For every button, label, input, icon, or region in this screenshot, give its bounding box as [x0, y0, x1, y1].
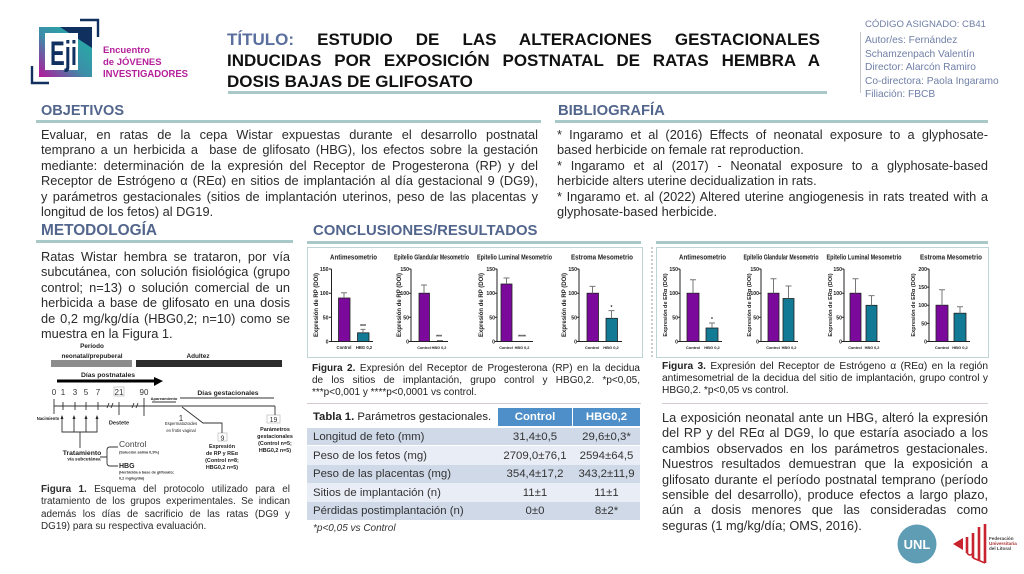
caption: figura 1: DG19) para su respectiva evaluación. — [41, 521, 206, 532]
panel: figure 2 charts — [307, 247, 643, 358]
figure 1: experimental protocol: 3 — [73, 388, 78, 397]
chart: epitelio glandular RP: 50 — [403, 316, 409, 322]
text: bibliografía: glyphosate-based herbicide. — [557, 204, 717, 219]
figure 1: experimental protocol: Apareamiento — [151, 396, 178, 401]
text: bibliografía: * Ingaramo et al (2017) - Neonatal exposure to a glyphosate-based — [557, 158, 988, 173]
title: DOSIS BAJAS DE GLIFOSATO — [227, 72, 473, 91]
figure 1: experimental protocol: 1 — [179, 414, 184, 423]
chart: estroma ER: 50 — [921, 322, 927, 328]
table: parámetros gestacionales: Control — [515, 411, 555, 423]
caption: figura 1: además los días de sacrificio de las ratas (DG9 y — [41, 509, 290, 520]
chart: epitelio glandular RP: *** — [436, 334, 442, 340]
chart: antimesometrio ER: Antimesometrio — [679, 252, 726, 262]
figure 1: experimental protocol: 5 — [84, 388, 89, 397]
chart: epitelio luminal ER: 150 — [833, 267, 842, 273]
figure 1: experimental protocol: 19 — [270, 417, 277, 424]
caption: figura 2: Figura 2. Expresión del Receptor de Progesterona (RP) en la decidua — [312, 363, 640, 374]
chart: antimesometrio RP: 50 — [323, 316, 329, 322]
figure 1: experimental protocol: 0,2 mg/kg/día) — [119, 476, 145, 480]
caption: figura 3: Figura 3. Expresión del Receptor de Estrógeno α (REα) en la región — [662, 361, 988, 372]
chart: estroma RP: 150 — [568, 267, 577, 273]
chart: epitelio luminal RP: 150 — [486, 267, 495, 273]
text: conclusiones: seguras (1 mg/kg/día; OMS, 2016). — [662, 518, 862, 533]
logo: Federación Universitaria del Litoral — [953, 524, 1017, 564]
chart: antimesometrio ER — [663, 252, 726, 350]
chart: epitelio glandular ER: Control — [766, 346, 780, 350]
chart: epitelio luminal ER: 50 — [836, 316, 842, 322]
chart: epitelio luminal ER — [826, 252, 902, 350]
chart: antimesometrio RP: *** — [360, 324, 366, 330]
text: objetivos: mediante: determinación de la expresión del Receptor de Progesterona (RP) y del — [41, 158, 538, 173]
figure 1: experimental protocol: Tratamiento — [63, 450, 101, 457]
table: parámetros gestacionales: Pérdidas postimplantación (n) — [313, 505, 464, 517]
figure 1: experimental protocol: HBG0,2 n=5) — [206, 465, 238, 471]
text: conclusiones: glifosato durante el período postnatal temprano (período — [662, 472, 988, 487]
caption: figura 1: Figura 1. Esquema del protocolo utilizado para el — [41, 484, 290, 495]
table: parámetros gestacionales: Sitios de implantación (n) — [313, 487, 441, 499]
caption: figura 3: HBG0,2. *p<0,05 vs control. — [662, 385, 789, 396]
text: metodología: herbicida a base de glifosato en una dosis — [41, 295, 290, 310]
table: parámetros gestacionales: 31,4±0,5 — [513, 431, 557, 443]
text: objetivos: longitud de los fetos) al DG19. — [41, 204, 213, 219]
chart: estroma RP: 50 — [571, 316, 577, 322]
text: conclusiones: del RP y del REα al DG9, lo que estaría asociado a los — [662, 425, 988, 440]
table: parámetros gestacionales: 29,6±0,3* — [582, 431, 631, 443]
table: parámetros gestacionales: 8±2* — [595, 505, 618, 517]
caption: figura 1: tratamiento de los grupos experimentales. Se indican — [41, 496, 290, 507]
chart: estroma RP: Expresión de RP (DOI) — [562, 273, 568, 337]
text: objetivos: temprano a un herbicida a base de glifosato (HBG), los efectos sobre la gestación — [41, 142, 538, 157]
logo: Federación Universitaria del Litoral: Universitaria — [989, 541, 1017, 546]
chart: epitelio glandular RP — [394, 252, 469, 350]
figure 1: experimental protocol: en frotis vaginal — [166, 428, 196, 433]
chart: epitelio glandular RP: 100 — [400, 291, 409, 297]
table: parámetros gestacionales — [307, 408, 640, 534]
chart: estroma ER: Expresión de ERα (DOI) — [911, 273, 917, 337]
table: parámetros gestacionales: Tabla 1. Parámetros gestacionales. — [313, 411, 491, 423]
chart: antimesometrio ER: * — [711, 317, 713, 323]
chart: estroma RP: HBG 0,2 — [603, 345, 620, 350]
heading: objetivos: OBJETIVOS — [41, 103, 124, 119]
figure 1: experimental protocol: Control — [119, 439, 147, 449]
chart: epitelio luminal ER: 0 — [839, 340, 842, 346]
table: parámetros gestacionales: 0±0 — [526, 505, 544, 517]
text: conclusiones: Nuestros resultados demuestran que la exposición a — [662, 456, 988, 471]
divider lines — [307, 403, 641, 404]
text: metodología: subcutánea, con solución fisiológica (grupo — [41, 264, 290, 279]
chart: epitelio glandular ER — [744, 252, 819, 350]
figure 1: experimental protocol: HBG — [119, 463, 135, 470]
table: parámetros gestacionales: 11±1 — [523, 487, 547, 499]
logo: Encuentro de Jóvenes Investigadores: Encuentro — [103, 45, 150, 56]
figure 1: experimental protocol: 0 — [52, 388, 57, 397]
chart: antimesometrio ER: 150 — [669, 267, 678, 273]
title: INDUCIDAS POR EXPOSICIÓN POSTNATAL DE RATAS HEMBRA A — [227, 51, 820, 70]
text: bibliografía: * Ingaramo et. al (2022) Altered uterine angiogenesis in rats treated with a — [557, 189, 988, 204]
chart: epitelio luminal ER: Control — [848, 346, 862, 350]
figure 1: experimental protocol: 7 — [96, 388, 101, 397]
figure 1: experimental protocol: de RP y REα — [206, 451, 239, 457]
table: parámetros gestacionales: *p<0,05 vs Control — [313, 523, 396, 534]
chart: antimesometrio RP — [314, 252, 377, 350]
table: parámetros gestacionales: 2709,0±76,1 — [503, 450, 567, 462]
text: conclusiones: aún a dosis menores que las consideradas como — [662, 502, 988, 517]
text: bibliografía — [557, 127, 988, 219]
text: bibliografía: herbicide alters uterine decidualization in rats. — [557, 173, 817, 188]
chart: epitelio glandular RP: HBG 0,2 — [432, 346, 446, 350]
chart: estroma ER: HBG 0,2 — [952, 345, 969, 350]
chart: epitelio glandular RP: 0 — [406, 340, 409, 346]
figure 1: experimental protocol: (Herbicida a base de glifosato; — [119, 470, 174, 474]
chart: estroma ER: 150 — [918, 285, 927, 291]
chart: epitelio luminal RP: Expresión de RP (DOI) — [479, 273, 485, 337]
chart: estroma RP: 0 — [574, 340, 577, 346]
table: parámetros gestacionales: Peso de los fetos (mg) — [313, 450, 427, 462]
figure 1: experimental protocol: (Solución salina 0,9%) — [119, 450, 160, 454]
chart: epitelio luminal RP: HBG 0,2 — [515, 346, 529, 350]
chart: antimesometrio RP: 100 — [320, 291, 329, 297]
text: conclusiones — [662, 410, 988, 533]
table: parámetros gestacionales: Peso de las placentas (mg) — [313, 468, 451, 480]
chart: epitelio glandular ER: HBG 0,2 — [782, 346, 796, 350]
figure 1: experimental protocol: vía subcutánea — [67, 456, 101, 462]
chart: epitelio luminal ER: 100 — [833, 291, 842, 297]
chart: estroma ER: Control — [935, 345, 949, 350]
table: parámetros gestacionales: Longitud de feto (mm) — [313, 431, 424, 443]
chart: estroma ER: 100 — [918, 303, 927, 309]
table: parámetros gestacionales: 2594±64,5 — [580, 450, 633, 462]
text: bibliografía: * Ingaramo et al (2016) Effects of neonatal exposure to a glyphosate- — [557, 127, 988, 142]
caption: figura 2: ***p<0,001 y ****p<0,0001 vs control. — [312, 387, 477, 398]
chart: antimesometrio ER: Control — [686, 345, 700, 350]
figure 1: experimental protocol: 9 — [221, 436, 225, 442]
chart: estroma RP: Estroma Mesometrio — [571, 252, 633, 262]
logo: Encuentro de Jóvenes Investigadores: Eji — [50, 35, 77, 73]
chart: estroma RP: * — [611, 305, 613, 311]
panel: figure 3 charts — [652, 247, 989, 358]
chart: epitelio luminal RP: Control — [499, 346, 513, 350]
table: parámetros gestacionales: HBG0,2 — [586, 411, 627, 423]
figure 1: experimental protocol: (Control n=8; — [205, 458, 239, 464]
text: metodología: control; n=13) o solución comercial de un — [41, 280, 290, 295]
chart: epitelio luminal ER: Epitelio Luminal Mesometrio — [826, 252, 902, 262]
text: objetivos — [41, 127, 538, 219]
chart: estroma RP: Control — [585, 345, 599, 350]
chart: antimesometrio RP: HBG 0,2 — [356, 345, 373, 350]
chart: estroma ER: 200 — [918, 267, 927, 273]
figure 1: experimental protocol: Nacimiento — [37, 416, 60, 421]
chart: epitelio luminal RP: 100 — [486, 291, 495, 297]
text: objetivos: y parámetros gestacionales (sitios de implantación uterinos, peso de las placentas y — [41, 189, 538, 204]
author information — [860, 18, 999, 100]
caption: figura 2: de los sitios de implantación, grupo control y HBG0,2. *p<0,05, — [312, 375, 640, 386]
chart: epitelio luminal RP — [477, 252, 552, 350]
text: conclusiones: La exposición neonatal ante un HBG, alteró la expresión — [662, 410, 988, 425]
chart: antimesometrio RP: Expresión de RP (DOI) — [314, 273, 320, 337]
chart: epitelio glandular RP: 150 — [400, 267, 409, 273]
figure 1: experimental protocol: 90 — [140, 388, 149, 397]
chart: epitelio glandular RP: Epitelio Glandular Mesometrio — [394, 252, 469, 262]
figure 1: experimental protocol: (Control n=5; — [258, 441, 292, 447]
figure 1: experimental protocol — [37, 343, 293, 480]
chart: epitelio luminal RP: 0 — [492, 340, 495, 346]
chart: epitelio luminal RP: Epitelio Luminal Mesometrio — [477, 252, 552, 262]
chart: estroma RP: 100 — [568, 291, 577, 297]
figure 1: experimental protocol: Adultez — [186, 353, 210, 360]
chart: antimesometrio RP: 0 — [326, 340, 329, 346]
table: parámetros gestacionales: 354,4±17,2 — [507, 468, 563, 480]
text: metodología: Ratas Wistar hembra se trataron, por vía — [41, 249, 290, 264]
heading: metodología: METODOLOGÍA — [41, 222, 157, 239]
chart: antimesometrio ER: Expresión de ERα (DOI) — [663, 273, 669, 337]
chart: antimesometrio ER: 50 — [672, 316, 678, 322]
figure 1: experimental protocol: 21 — [115, 388, 124, 397]
text: conclusiones: cambios observados en los parámetros gestacionales. — [662, 441, 988, 456]
author information: CÓDIGO ASIGNADO: CB41 — [865, 19, 986, 30]
figure 1: experimental protocol: Destete — [109, 420, 129, 426]
logo: Encuentro de Jóvenes Investigadores: INVESTIGADORES — [103, 69, 188, 80]
chart: epitelio glandular ER: 50 — [753, 316, 759, 322]
figure 1: experimental protocol: Parámetros — [260, 427, 290, 433]
caption: figura 1 — [41, 484, 290, 532]
text: metodología: de 0,2 mg/kg/día (HBG0,2; n=10) como se — [41, 311, 290, 326]
chart: epitelio glandular ER: 150 — [750, 267, 759, 273]
chart: estroma ER: Estroma Mesometrio — [920, 252, 982, 262]
figure 1: experimental protocol: Período — [80, 343, 104, 350]
logo: Federación Universitaria del Litoral: del Litoral — [989, 546, 1011, 551]
chart: epitelio luminal RP: 50 — [489, 316, 495, 322]
text: bibliografía: based herbicide on female rat reproduction. — [557, 142, 804, 157]
caption: figura 2 — [312, 363, 640, 398]
chart: antimesometrio ER: 0 — [675, 340, 678, 346]
text: metodología: muestra en la Figura 1. — [41, 326, 173, 341]
figure 1: experimental protocol: Espermatozoides — [165, 421, 197, 426]
chart: antimesometrio RP: Control — [337, 345, 351, 350]
table: parámetros gestacionales: 11±1 — [594, 487, 619, 499]
chart: antimesometrio RP: Antimesometrio — [330, 252, 377, 262]
chart: antimesometrio ER: HBG 0,2 — [704, 345, 721, 350]
chart: epitelio luminal ER: HBG 0,2 — [865, 346, 879, 350]
author information: Director: Alarcón Ramiro — [865, 62, 976, 73]
figure 1: experimental protocol: neonatal/prepuberal — [61, 353, 123, 360]
chart: estroma ER — [911, 252, 982, 350]
heading: bibliografía: BIBLIOGRAFÍA — [558, 103, 665, 119]
chart: epitelio glandular RP: Expresión de RP (DOI) — [397, 273, 403, 337]
author information: Autor/es: Fernández — [865, 35, 957, 46]
figure 1: experimental protocol: Días gestacionales — [197, 390, 259, 397]
text: conclusiones: sensible del desarrollo), produce efectos a largo plazo, — [662, 487, 988, 502]
logo: Encuentro de Jóvenes Investigadores: de JÓVENES — [103, 56, 162, 68]
chart: epitelio luminal RP: **** — [518, 334, 526, 340]
figure 1: experimental protocol: gestacionales — [257, 434, 293, 440]
caption: figura 3: antimesometrial de la decidua del sitio de implantación, grupo control y — [662, 373, 988, 384]
figure 1: experimental protocol: Expresión — [209, 444, 235, 450]
text: objetivos: Receptor de Estrógeno α (REα) en sitios de implantación al día gestacional 9 (DG9), — [41, 173, 538, 188]
logo: UNL: UNL — [904, 537, 930, 552]
logo: Encuentro de Jóvenes Investigadores — [30, 18, 188, 84]
chart: antimesometrio ER: 100 — [669, 291, 678, 297]
text: objetivos: Evaluar, en ratas de la cepa Wistar expuestas durante el desarrollo postnatal — [41, 127, 538, 142]
figure 1: experimental protocol: 1 — [61, 388, 66, 397]
table: parámetros gestacionales: 343,2±11,9 — [578, 468, 635, 480]
figure 1: experimental protocol: Días postnatales — [81, 372, 135, 379]
heading: conclusiones/resultados: CONCLUSIONES/RESULTADOS — [313, 223, 537, 239]
chart: estroma ER: 0 — [924, 340, 927, 346]
author information: Schamzenpach Valentín — [865, 49, 975, 60]
title — [227, 30, 820, 91]
chart: epitelio glandular ER: 100 — [750, 291, 759, 297]
text: metodología — [41, 249, 290, 341]
chart: antimesometrio RP: 150 — [320, 267, 329, 273]
chart: epitelio glandular ER: Epitelio Glandular Mesometrio — [744, 252, 819, 262]
chart: epitelio glandular RP: Control — [417, 346, 431, 350]
figure 1: experimental protocol: HBG0,2 n=5) — [259, 448, 291, 454]
author information: Co-directora: Paola Ingaramo — [865, 76, 999, 87]
logo: UNL — [898, 524, 936, 564]
caption: figura 3 — [662, 361, 988, 396]
title: TÍTULO: ESTUDIO DE LAS ALTERACIONES GESTACIONALES — [227, 30, 820, 49]
chart: epitelio glandular ER: 0 — [756, 340, 759, 346]
chart: epitelio luminal ER: Expresión de ERα (DOI) — [828, 273, 834, 337]
chart: estroma RP — [562, 252, 633, 350]
logo: Federación Universitaria del Litoral: Federación — [989, 536, 1014, 541]
chart: epitelio glandular ER: Expresión de ERα (DOI) — [747, 273, 753, 337]
author information: Filiación: FBCB — [865, 89, 935, 100]
